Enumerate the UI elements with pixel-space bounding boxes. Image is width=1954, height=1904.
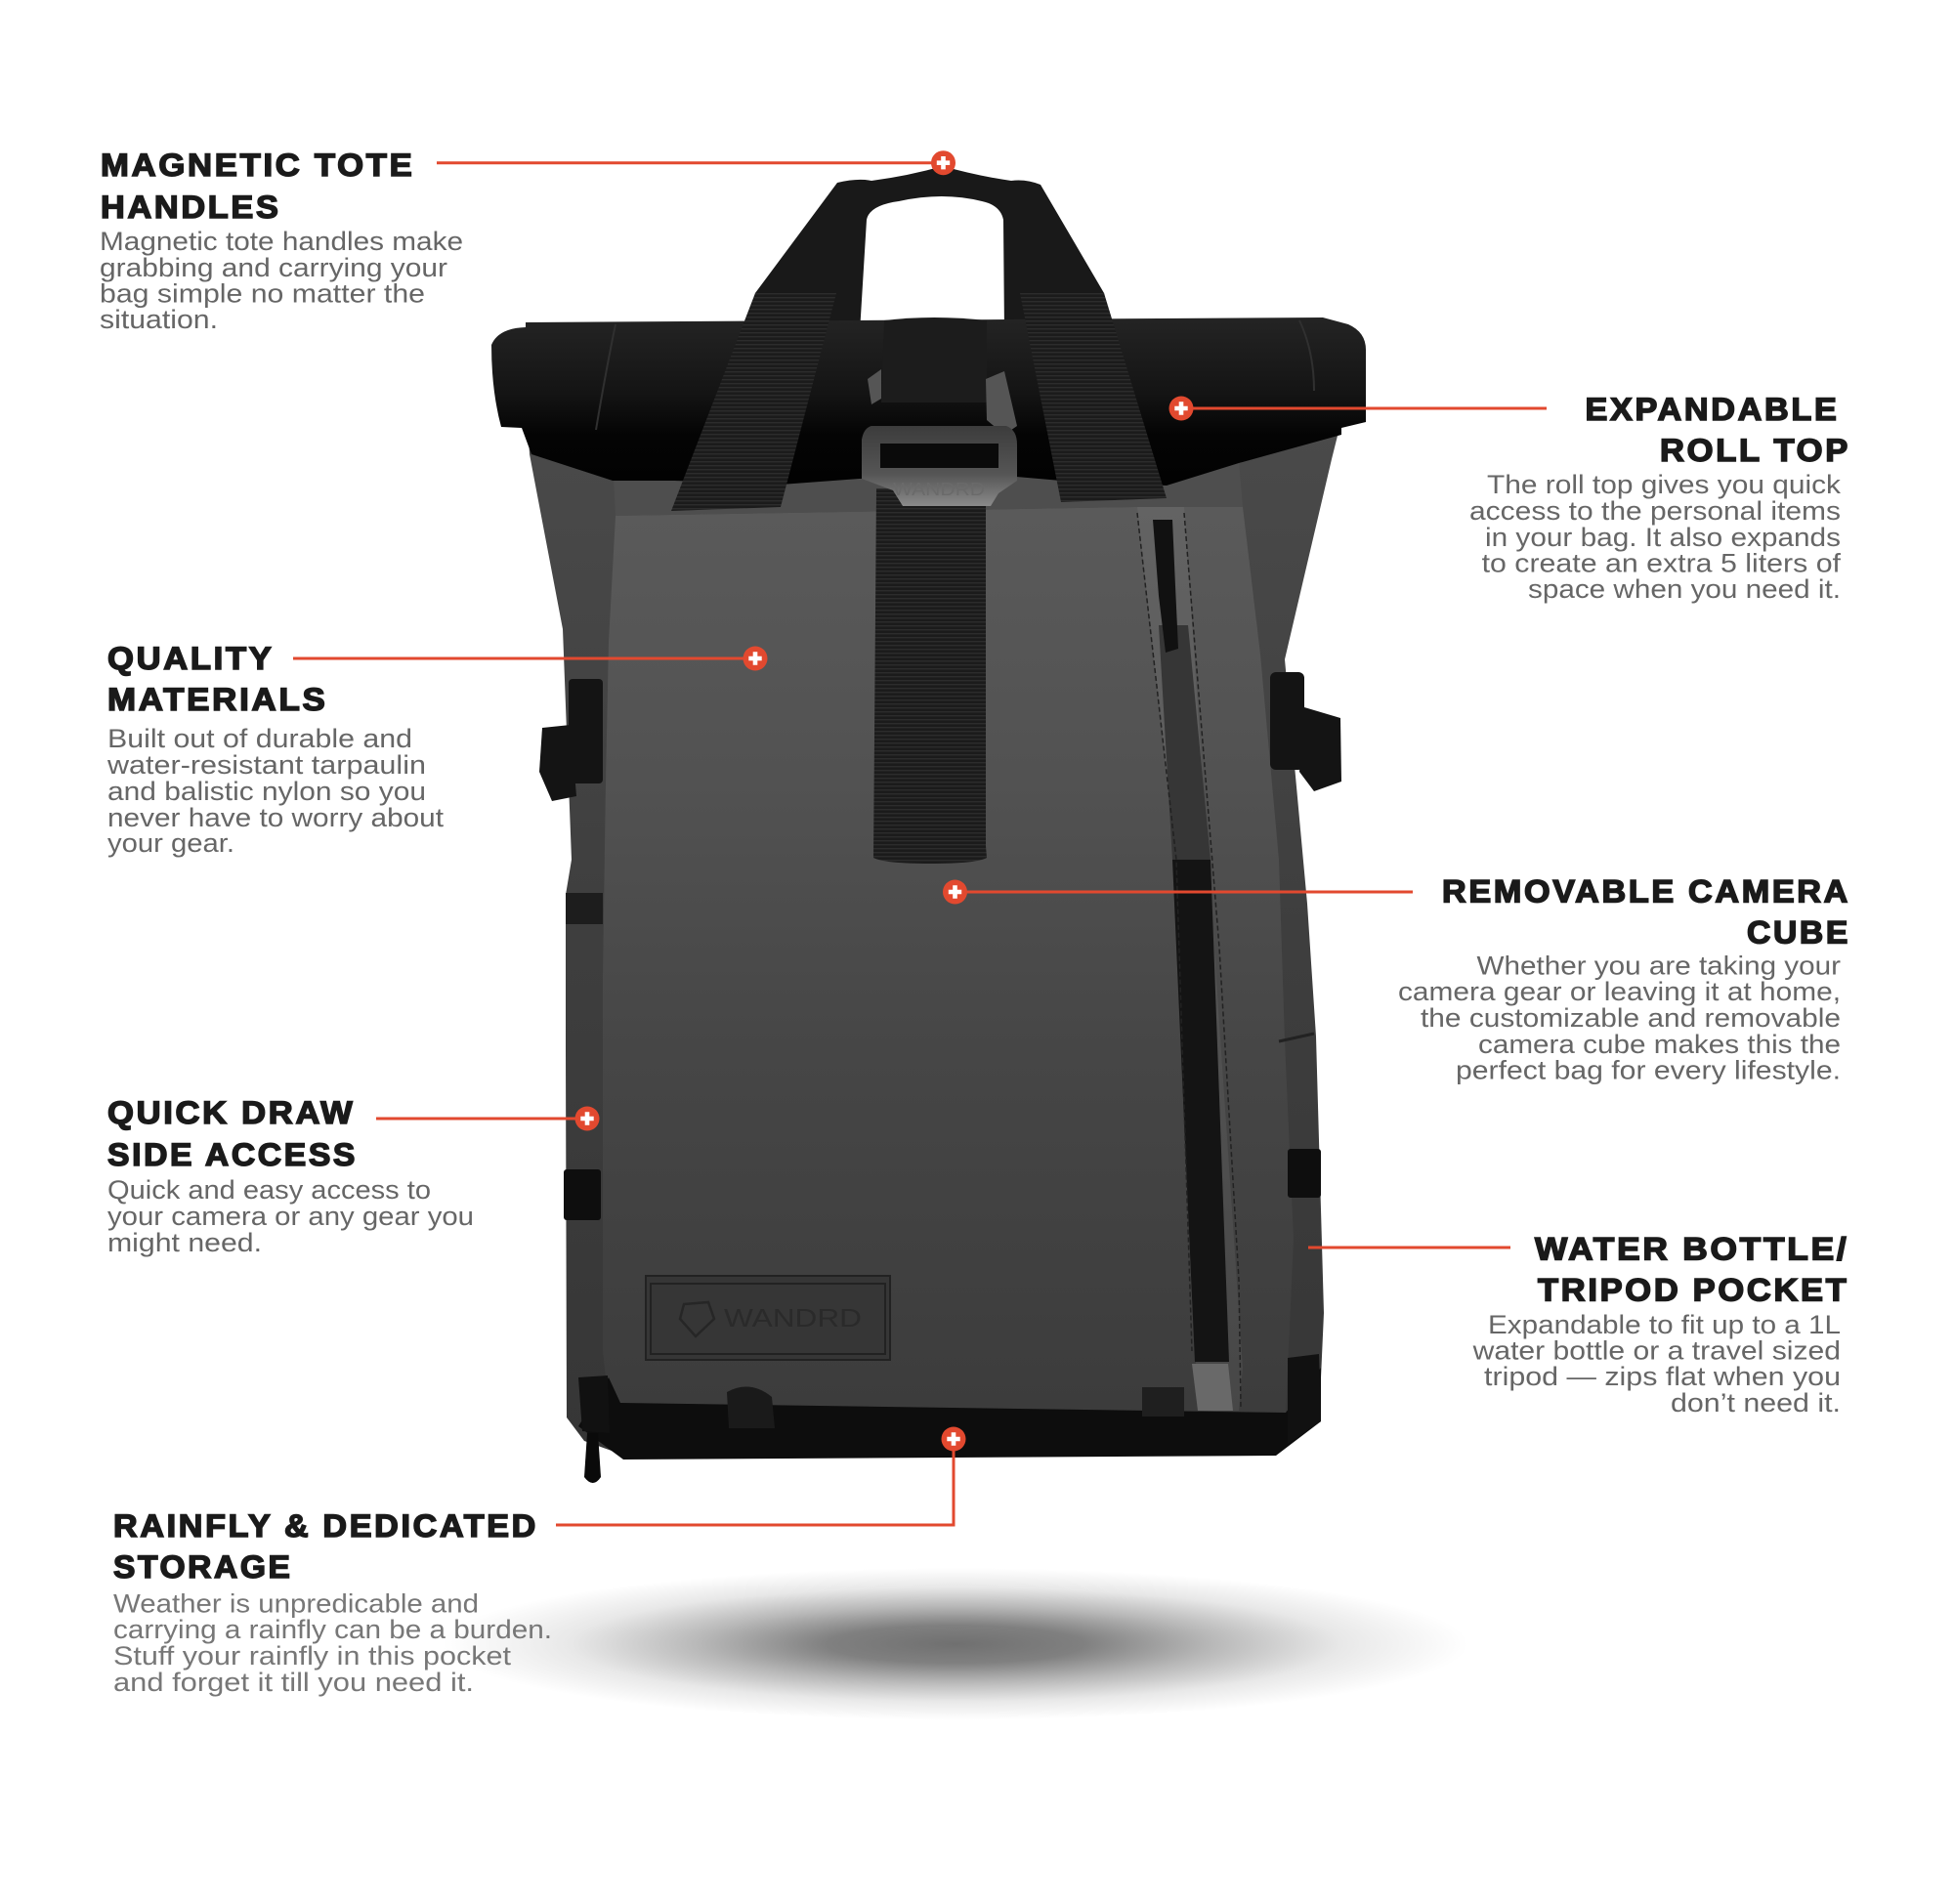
marker — [943, 879, 967, 905]
heading: STORAGE — [113, 1549, 293, 1585]
heading: SIDE ACCESS — [107, 1137, 358, 1172]
right lower pocket edge — [1279, 1034, 1314, 1041]
right side buckle — [1270, 672, 1341, 791]
marker — [931, 150, 956, 175]
heading: ROLL TOP — [1660, 433, 1850, 468]
centre strap — [873, 488, 987, 864]
text: Quick and easy access to — [107, 1175, 431, 1205]
logo wordmark: WANDRD — [724, 1303, 862, 1333]
text: might need. — [107, 1228, 262, 1257]
text: Magnetic tote handles make — [100, 227, 463, 256]
buckle — [862, 369, 1017, 506]
right corner trim — [1288, 1354, 1321, 1444]
left side buckle — [539, 679, 603, 801]
ground shadow — [443, 1568, 1468, 1720]
heading: WATER BOTTLE/ — [1535, 1231, 1848, 1266]
logo mark — [680, 1302, 714, 1336]
text — [1471, 1310, 1841, 1417]
top loop strap — [881, 317, 987, 402]
text — [1469, 470, 1842, 604]
text: carrying a rainfly can be a burden. — [113, 1615, 552, 1644]
text: water-resistant tarpaulin — [106, 750, 426, 780]
heading: TRIPOD POCKET — [1538, 1273, 1848, 1308]
callout: magnetic tote handles — [100, 148, 956, 334]
text — [1398, 952, 1841, 1085]
callout: expandable roll top — [1168, 392, 1850, 604]
heading: QUALITY — [107, 641, 274, 676]
text: to create an extra 5 liters of — [1482, 549, 1842, 578]
text: the customizable and removable — [1421, 1003, 1841, 1033]
text: space when you need it. — [1528, 574, 1841, 604]
front panel — [603, 507, 1294, 1413]
callout: quality materials — [106, 641, 768, 858]
backpack illustration — [491, 166, 1366, 1483]
upper flap — [613, 459, 1243, 516]
side pocket trim — [566, 893, 603, 924]
marker — [743, 647, 768, 670]
side zip pull — [584, 1433, 601, 1483]
zipper — [1137, 507, 1243, 1411]
text: your gear. — [107, 828, 234, 858]
text — [106, 724, 445, 858]
heading: QUICK DRAW — [107, 1095, 356, 1130]
text: don’t need it. — [1671, 1388, 1841, 1417]
text: your camera or any gear you — [107, 1202, 474, 1231]
bottom loop left — [727, 1387, 775, 1428]
side panel — [528, 420, 1341, 1456]
heading: MAGNETIC TOTE — [101, 148, 414, 183]
text: never have to worry about — [107, 803, 445, 832]
heading: MATERIALS — [107, 682, 328, 717]
text — [113, 1588, 552, 1697]
text: Expandable to fit up to a 1L — [1488, 1310, 1841, 1339]
text — [100, 227, 463, 334]
callout: rainfly and dedicated storage — [113, 1426, 965, 1697]
heading: EXPANDABLE — [1585, 392, 1839, 427]
buckle wordmark: WANDRD — [893, 480, 985, 499]
tote handles — [750, 166, 1112, 332]
text: Whether you are taking your — [1477, 952, 1841, 981]
marker — [1168, 397, 1194, 420]
bottom loop right — [1142, 1387, 1184, 1417]
text: Weather is unpredicable and — [113, 1588, 479, 1618]
rolled top — [491, 317, 1366, 486]
text: grabbing and carrying your — [100, 253, 447, 282]
marker — [942, 1426, 965, 1452]
callout: quick draw side access — [107, 1095, 600, 1257]
heading: CUBE — [1747, 914, 1850, 950]
text — [107, 1175, 474, 1257]
text: access to the personal items — [1469, 496, 1841, 526]
text: and balistic nylon so you — [107, 777, 426, 806]
left webbing strap — [671, 293, 836, 511]
text: situation. — [100, 305, 218, 334]
roll folds — [596, 320, 1314, 430]
text: water bottle or a travel sized — [1471, 1336, 1841, 1366]
heading: HANDLES — [101, 190, 281, 225]
text: and forget it till you need it. — [113, 1668, 474, 1697]
logo patch — [646, 1276, 890, 1360]
left corner trim — [578, 1375, 610, 1433]
bottom storage pocket — [578, 1368, 1321, 1460]
text: camera cube makes this the — [1478, 1030, 1841, 1059]
callout: water bottle tripod pocket — [1308, 1231, 1848, 1417]
left compression strap — [564, 1169, 601, 1220]
text: tripod — zips flat when you — [1484, 1362, 1841, 1391]
text: perfect bag for every lifestyle. — [1456, 1056, 1841, 1085]
marker — [574, 1106, 600, 1131]
text: camera gear or leaving it at home, — [1398, 977, 1841, 1006]
right compression strap — [1288, 1149, 1321, 1198]
text: in your bag. It also expands — [1485, 523, 1841, 552]
heading: RAINFLY & DEDICATED — [113, 1508, 538, 1544]
heading: REMOVABLE CAMERA — [1442, 873, 1850, 909]
right webbing strap — [1020, 293, 1167, 502]
text: Built out of durable and — [107, 724, 412, 753]
callout: removable camera cube — [943, 873, 1850, 1085]
text: The roll top gives you quick — [1487, 470, 1842, 499]
text: bag simple no matter the — [100, 279, 425, 309]
text: Stuff your rainfly in this pocket — [113, 1641, 512, 1671]
